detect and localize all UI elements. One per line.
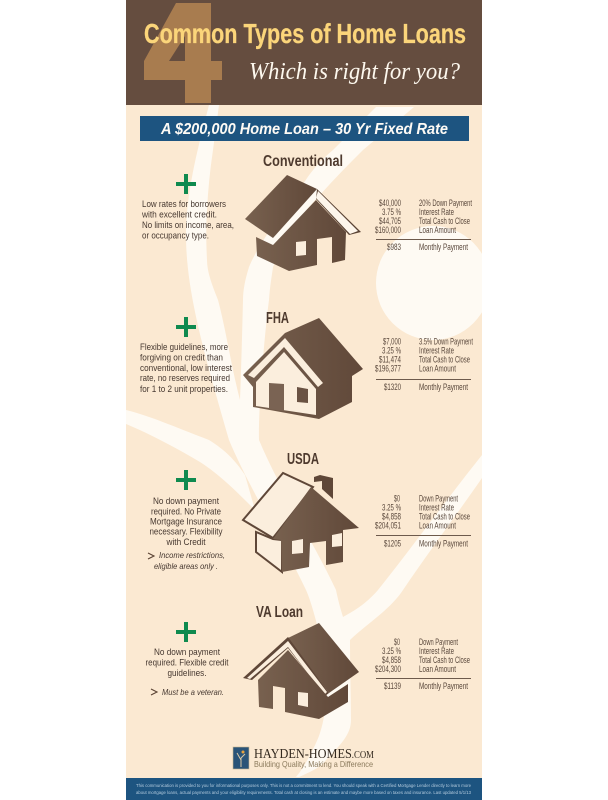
loan figures: Monthly Payment xyxy=(419,382,468,392)
description: or occupancy type. xyxy=(142,230,209,242)
icon: house xyxy=(243,473,359,572)
icon: house xyxy=(243,623,359,719)
loan figures: Total Cash to Close xyxy=(419,354,470,364)
loan figures: 3.25 % xyxy=(382,502,401,512)
loan figures: $196,377 xyxy=(375,364,401,374)
title: Common Types of Home Loans xyxy=(144,18,466,49)
subtitle: Which is right for you? xyxy=(249,59,460,85)
loan figures: $4,858 xyxy=(382,512,401,522)
loan figures: Loan Amount xyxy=(419,664,456,674)
note: veteran: Must be a veteran. xyxy=(162,687,224,697)
loan figures: Monthly Payment xyxy=(419,242,468,252)
panel: USDA xyxy=(148,451,471,572)
loan figures: 3.5% Down Payment xyxy=(419,336,473,346)
description xyxy=(146,647,229,679)
wordmark: HAYDEN-HOMES.COM xyxy=(254,747,374,762)
heading: USDA xyxy=(287,451,319,468)
loan figures: $204,051 xyxy=(375,520,401,530)
banner: loan amount xyxy=(140,116,469,141)
banner: loan amount: A $200,000 Home Loan – 30 Yr Fixed Rate xyxy=(160,121,448,138)
big number 4 xyxy=(144,3,222,103)
description: for 1 to 2 unit properties. xyxy=(140,384,228,395)
loan figures: 3.25 % xyxy=(382,646,401,656)
loan figures: Down Payment xyxy=(419,494,458,504)
icon: house xyxy=(243,318,363,419)
icon: tree logo xyxy=(233,747,249,769)
footer disclaimer: about mortgage loans, actual payments and your eligibility requirements. Total cash at closing is an estimate and maybe more based on taxes and insurance. Last updated 5/1/13 xyxy=(136,790,472,795)
description: Mortgage Insurance xyxy=(150,516,222,528)
infographic canvas xyxy=(126,0,482,800)
header band xyxy=(126,0,482,105)
loan figures: Loan Amount xyxy=(419,520,456,530)
description: guidelines. xyxy=(168,668,206,679)
loan figures xyxy=(375,336,473,392)
description: conventional, low interest xyxy=(140,363,232,374)
loan figures: 3.25 % xyxy=(382,346,401,356)
footer disclaimer xyxy=(126,778,482,800)
note: restrictions xyxy=(148,550,225,571)
loan figures: Down Payment xyxy=(419,637,458,647)
loan figures: 3.75 % xyxy=(382,207,401,217)
loan figures: Total Cash to Close xyxy=(419,216,470,226)
loan figures: $0 xyxy=(394,494,400,504)
note: restrictions: eligible areas only . xyxy=(154,561,218,571)
description: forgiving on credit than xyxy=(140,352,223,364)
loan figures: Interest Rate xyxy=(419,207,454,217)
loan figures: Loan Amount xyxy=(419,225,456,235)
icon: plus xyxy=(176,174,196,194)
loan figures: $1320 xyxy=(384,382,401,392)
loan figures: Loan Amount xyxy=(419,364,456,374)
description xyxy=(150,496,223,548)
description: No down payment xyxy=(154,647,220,658)
heading: Conventional xyxy=(263,153,343,170)
icon: plus xyxy=(176,622,196,642)
description: Low rates for borrowers xyxy=(142,199,226,210)
description xyxy=(141,199,234,242)
loan figures: $1139 xyxy=(384,681,401,691)
description: Flexible guidelines, more xyxy=(140,342,228,353)
description: rate, no reserves required xyxy=(140,373,230,384)
loan figures: Monthly Payment xyxy=(419,538,468,548)
loan figures xyxy=(375,494,471,548)
loan figures: $1205 xyxy=(384,538,401,548)
heading: FHA xyxy=(266,310,289,327)
loan figures: Total Cash to Close xyxy=(419,655,470,665)
description: No limits on income, area, xyxy=(142,220,234,231)
description: with Credit xyxy=(166,537,206,548)
loan figures: $4,858 xyxy=(382,655,401,665)
description: necessary. Flexibility xyxy=(150,526,223,538)
description: required. Flexible credit xyxy=(146,658,229,668)
description: required. No Private xyxy=(151,506,221,518)
loan figures: Interest Rate xyxy=(419,502,454,512)
loan figures: Monthly Payment xyxy=(419,681,468,691)
loan figures: $11,474 xyxy=(379,354,401,364)
icon: house xyxy=(245,175,361,271)
icon: plus xyxy=(176,317,196,337)
note: restrictions: Income restrictions, xyxy=(159,550,225,560)
loan figures xyxy=(375,198,472,252)
loan figures xyxy=(375,637,471,691)
tagline: Building Quality, Making a Difference xyxy=(254,759,373,769)
heading: VA Loan xyxy=(256,604,303,621)
loan figures: 20% Down Payment xyxy=(419,198,472,208)
panel: FHA xyxy=(140,310,473,419)
loan figures: $160,000 xyxy=(375,225,401,235)
logo xyxy=(233,747,374,769)
loan figures: Interest Rate xyxy=(419,346,454,356)
loan figures: Total Cash to Close xyxy=(419,512,470,522)
loan figures: $44,705 xyxy=(379,216,401,226)
loan figures: $40,000 xyxy=(379,198,401,208)
loan figures: $983 xyxy=(387,242,401,252)
panel: conventional xyxy=(141,153,472,271)
loan figures: $7,000 xyxy=(383,336,401,346)
icon: plus xyxy=(176,470,196,490)
description: No down payment xyxy=(153,496,219,507)
loan figures: $0 xyxy=(394,637,400,647)
panel: VA loan xyxy=(146,604,471,719)
description: with excellent credit. xyxy=(141,210,217,220)
description xyxy=(140,342,232,395)
loan figures: $204,300 xyxy=(375,664,401,674)
footer disclaimer: This communication is provided to you for informational purposes only. This is not a commitment to lend. You should speak with a Certified Mortgage Lender directly to learn more xyxy=(136,783,472,788)
loan figures: Interest Rate xyxy=(419,646,454,656)
